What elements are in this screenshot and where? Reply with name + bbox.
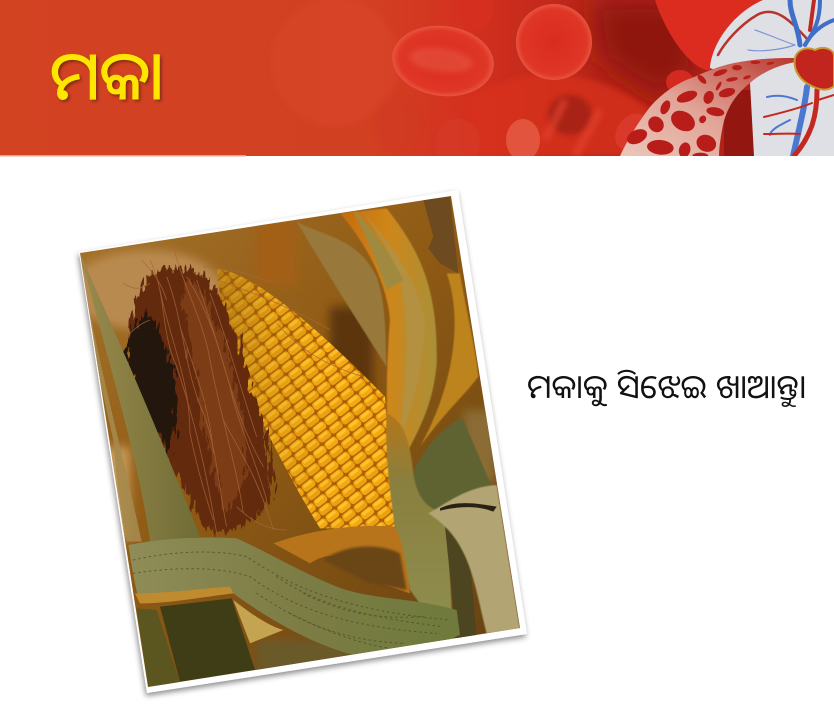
back husk leaves: [297, 222, 387, 367]
lower stalk: [160, 598, 255, 682]
horizontal stalk: [128, 537, 460, 655]
silk: [123, 247, 363, 533]
husk wrapped under the cob: [273, 526, 410, 593]
cells inside vessel: [625, 61, 775, 159]
heart: [795, 48, 834, 90]
background tones: [70, 220, 497, 673]
photo content: [80, 196, 520, 687]
caption text: ମକାକୁ ସିଝେଇ ଖାଆନ୍ତୁ।: [527, 368, 807, 405]
large cell top right: [655, 0, 765, 70]
left leaf: [80, 253, 200, 542]
white frame: [79, 190, 527, 693]
blood vessel cross-section: [620, 58, 795, 156]
circulation panel: [710, 0, 834, 156]
corn cob: [217, 268, 395, 528]
red blood cells: [392, 4, 644, 156]
arteries and veins: [718, 0, 834, 156]
title: ମକା: [50, 39, 164, 114]
corn photo: [60, 180, 540, 700]
blurred blood cell background: [472, 0, 754, 156]
header banner: [0, 0, 834, 167]
right stem and leaves: [423, 197, 458, 273]
